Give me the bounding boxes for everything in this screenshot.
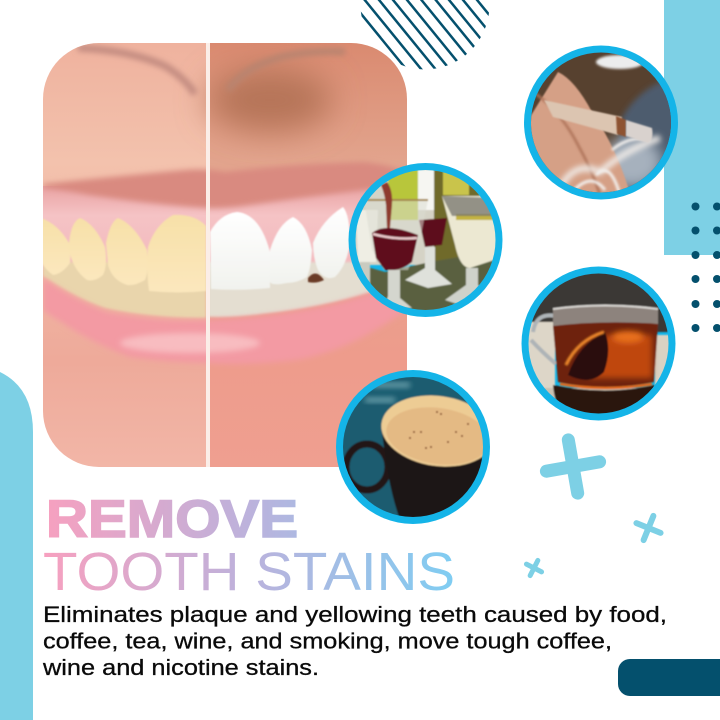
front glass bowl — [364, 200, 428, 270]
nose shadow — [208, 68, 332, 132]
teal table — [335, 370, 495, 525]
cup handle — [346, 444, 388, 490]
wine pour — [381, 182, 392, 228]
upper gum — [43, 186, 368, 270]
left half skin — [43, 43, 208, 467]
lower teeth — [43, 262, 206, 318]
cigarette ember — [616, 116, 626, 137]
cigarette ash — [626, 120, 652, 143]
table — [525, 322, 555, 392]
circle photo: wine glasses — [348, 163, 505, 320]
background — [356, 170, 480, 266]
ring — [524, 46, 678, 200]
green bottle — [388, 170, 418, 220]
front stem — [384, 270, 412, 308]
crema specks — [409, 411, 469, 449]
glass rim — [553, 306, 658, 326]
upper lip — [43, 162, 407, 208]
decorative panel: top right — [664, 0, 720, 255]
foreground — [525, 388, 675, 423]
blue jacket — [614, 80, 671, 192]
decorative pill: bottom right — [618, 659, 720, 696]
table — [360, 257, 492, 310]
cup body — [382, 430, 495, 525]
photo divider — [206, 43, 210, 467]
panel: before and after smile photo — [41, 43, 407, 467]
left rear glass — [356, 210, 378, 262]
plus: large — [534, 428, 612, 505]
white upper teeth — [210, 207, 350, 290]
plus: small — [519, 553, 549, 583]
white wine glass — [442, 196, 500, 268]
crema — [383, 401, 493, 471]
white wine stem — [444, 266, 480, 304]
ring — [336, 370, 490, 524]
title line: remove: REMOVE — [46, 490, 298, 549]
white gap — [418, 170, 434, 210]
description text: wine and nicotine stains. — [42, 655, 319, 680]
decorative panel: bottom left — [0, 372, 33, 720]
cup handle — [531, 315, 556, 364]
front glass red wine — [372, 228, 418, 270]
saucer — [553, 385, 655, 422]
dark background — [530, 50, 675, 195]
right half skin — [208, 43, 407, 467]
middle wine — [419, 218, 447, 247]
ring — [522, 266, 676, 420]
top smoke — [596, 55, 644, 69]
circle photo: tea — [522, 266, 676, 423]
lower lip — [43, 278, 407, 364]
table highlights — [365, 385, 410, 400]
cigarette — [544, 100, 622, 135]
tea bag — [568, 332, 608, 380]
right nostril — [228, 52, 345, 90]
description text: coffee, tea, wine, and smoking, move tough coffee, — [43, 628, 612, 654]
yellow upper teeth — [41, 215, 206, 292]
plus: medium — [628, 507, 669, 549]
lower lip highlight — [120, 333, 260, 353]
smoke wisps — [560, 138, 660, 188]
orange glow — [590, 335, 652, 378]
title — [43, 490, 455, 602]
finger crease — [533, 92, 600, 195]
description text: Eliminates plaque and yellowing teeth caused by food, — [43, 602, 667, 627]
hand — [531, 72, 629, 192]
circle photo: smoking — [524, 46, 680, 200]
circle photo: coffee — [335, 370, 499, 525]
decorative hatched circle — [360, 0, 489, 70]
left nostril — [78, 48, 195, 94]
drifting smoke — [602, 136, 662, 188]
description text — [42, 602, 667, 680]
decorative dot grid — [692, 202, 720, 332]
dark background — [525, 270, 675, 332]
middle stem — [405, 247, 452, 288]
gap shadow — [308, 273, 324, 283]
ring — [348, 163, 502, 317]
yellow bottle — [434, 170, 480, 262]
title line: tooth stains: TOOTH STAINS — [43, 542, 455, 602]
tea — [553, 322, 658, 387]
lower teeth, whitened — [208, 262, 372, 317]
coffee rim — [377, 388, 499, 474]
